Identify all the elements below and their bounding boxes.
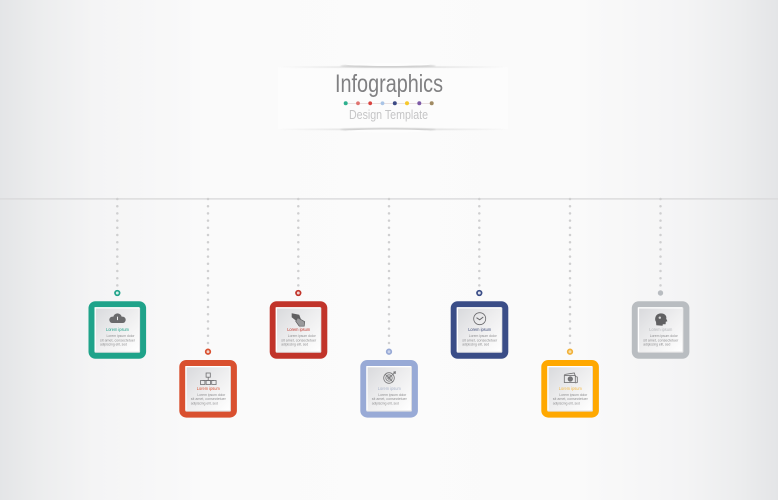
colored dot row <box>344 101 434 105</box>
title text: Lorem ipsum <box>468 327 491 332</box>
body text <box>281 334 317 347</box>
bottom shadow line <box>278 128 508 132</box>
body text: Lorem ipsum dolor <box>378 393 407 397</box>
horizontal rail <box>0 198 778 200</box>
connector 2 <box>206 199 210 354</box>
connector 5 <box>477 199 482 295</box>
card 3: red <box>270 301 327 359</box>
lighter title backing <box>278 67 508 129</box>
title text: Lorem ipsum <box>287 327 310 332</box>
body text: Lorem ipsum dolor <box>559 393 588 397</box>
icon: banknotes <box>564 373 577 383</box>
body text: Lorem ipsum dolor <box>197 393 226 397</box>
body text: sit amet, consectetuer <box>281 338 317 342</box>
body text: adipiscing elit, sed <box>100 343 127 347</box>
body text <box>100 334 136 347</box>
title text: Lorem ipsum <box>559 386 582 391</box>
body text <box>372 393 408 405</box>
body text: adipiscing elit, sed <box>462 343 489 347</box>
icon: hand with card <box>292 313 305 326</box>
body text: sit amet, consectetuer <box>643 338 679 342</box>
body text: adipiscing elit, sed <box>643 343 670 347</box>
connector 6 <box>568 199 572 354</box>
card 7: grey <box>632 301 689 359</box>
body text: Lorem ipsum dolor <box>650 334 678 338</box>
body text <box>643 334 679 347</box>
body text: sit amet, consectetuer <box>100 338 136 342</box>
body text: sit amet, consectetuer <box>191 397 227 401</box>
body text <box>462 334 498 347</box>
card 4: periwinkle <box>360 360 418 418</box>
top shadow line <box>278 63 508 68</box>
body text: Lorem ipsum dolor <box>469 334 497 338</box>
title text: Lorem ipsum <box>649 327 672 332</box>
title text: Lorem ipsum <box>106 327 129 332</box>
subtitle: Design Template <box>349 107 428 122</box>
body text: adipiscing elit, sed <box>191 401 218 405</box>
body text: adipiscing elit, sed <box>372 401 399 405</box>
body text: sit amet, consectetuer <box>462 338 498 342</box>
body text: sit amet, consectetuer <box>372 397 408 401</box>
body text <box>553 393 589 405</box>
icon: clock <box>474 313 486 325</box>
card 5: navy <box>451 301 508 359</box>
card 1: teal <box>88 301 146 359</box>
icon: target <box>384 372 395 383</box>
body text: sit amet, consectetuer <box>553 397 589 401</box>
connector 7 <box>658 199 663 296</box>
card 6: amber <box>541 360 599 418</box>
heading: Infographics <box>335 70 443 98</box>
connector 3 <box>296 199 301 295</box>
title text: Lorem ipsum <box>378 386 401 391</box>
body text: Lorem ipsum dolor <box>106 334 135 338</box>
body text: adipiscing elit, sed <box>553 401 580 405</box>
icon: hierarchy <box>200 373 216 384</box>
icon: cloud <box>109 313 126 323</box>
connector 4 <box>387 199 391 354</box>
title text: Lorem ipsum <box>197 386 220 391</box>
connector 1 <box>115 199 120 295</box>
title panel <box>278 63 508 132</box>
card 2: orange-red <box>179 360 237 418</box>
icon: head <box>655 313 667 326</box>
body text: Lorem ipsum dolor <box>288 334 316 338</box>
body text: adipiscing elit, sed <box>281 343 308 347</box>
body text <box>191 393 227 405</box>
